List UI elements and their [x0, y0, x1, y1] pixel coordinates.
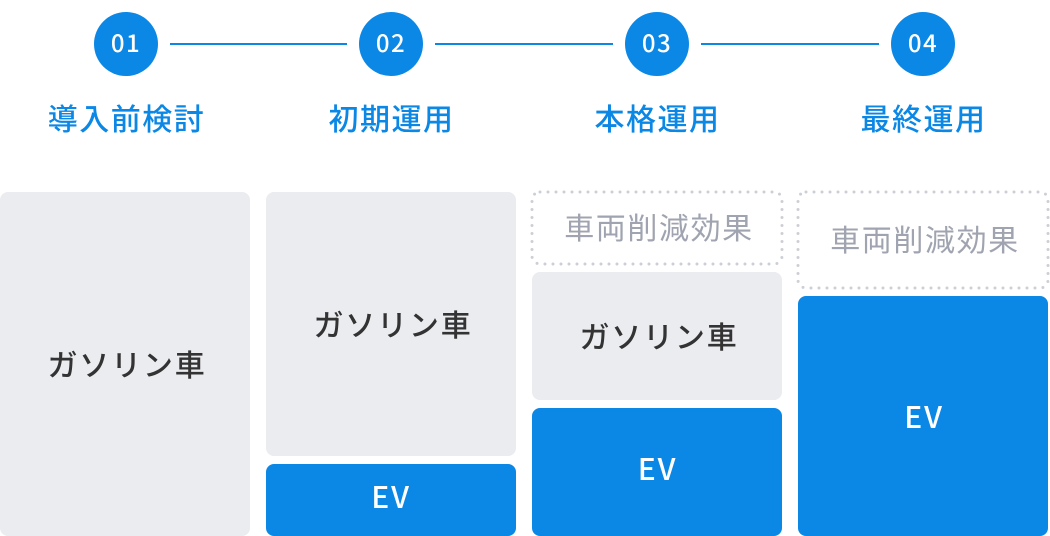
- column 2: gasoline vehicles: ガソリン車: [314, 301, 472, 345]
- column 3: EV: [532, 408, 782, 536]
- column 1: gasoline vehicles: ガソリン車: [48, 341, 206, 385]
- step badge 02: [359, 12, 423, 76]
- column 2: EV: EV: [371, 473, 411, 517]
- column 2: gasoline vehicles: [266, 192, 516, 456]
- step badge 02: 02: [376, 24, 406, 59]
- column 3: gasoline vehicles: ガソリン車: [580, 313, 738, 357]
- column 1: gasoline vehicles: [0, 192, 250, 536]
- column 2: EV: [266, 464, 516, 536]
- heading: step 1: 導入前検討: [48, 95, 205, 139]
- step badge 04: [891, 12, 955, 76]
- column 3: vehicle reduction effect: 車両削減効果: [564, 204, 754, 248]
- column 3: gasoline vehicles: [532, 272, 782, 400]
- step connector line 1: [170, 43, 347, 45]
- column 3: vehicle reduction effect: [530, 190, 784, 266]
- column 3: EV: EV: [638, 445, 677, 489]
- step connector line 2: [435, 43, 613, 45]
- column 4: vehicle reduction effect: 車両削減効果: [830, 216, 1020, 260]
- column 4: EV: EV: [904, 393, 944, 437]
- column 4: vehicle reduction effect: [796, 190, 1050, 290]
- heading: step 4: 最終運用: [860, 95, 986, 139]
- step badge 01: 01: [111, 24, 141, 59]
- step badge 04: 04: [908, 24, 938, 59]
- step badge 01: [94, 12, 158, 76]
- step badge 03: [625, 12, 689, 76]
- step badge 03: 03: [642, 24, 672, 59]
- column 4: EV: [798, 296, 1048, 536]
- heading: step 2: 初期運用: [328, 95, 454, 139]
- heading: step 3: 本格運用: [594, 95, 720, 139]
- step connector line 3: [701, 43, 879, 45]
